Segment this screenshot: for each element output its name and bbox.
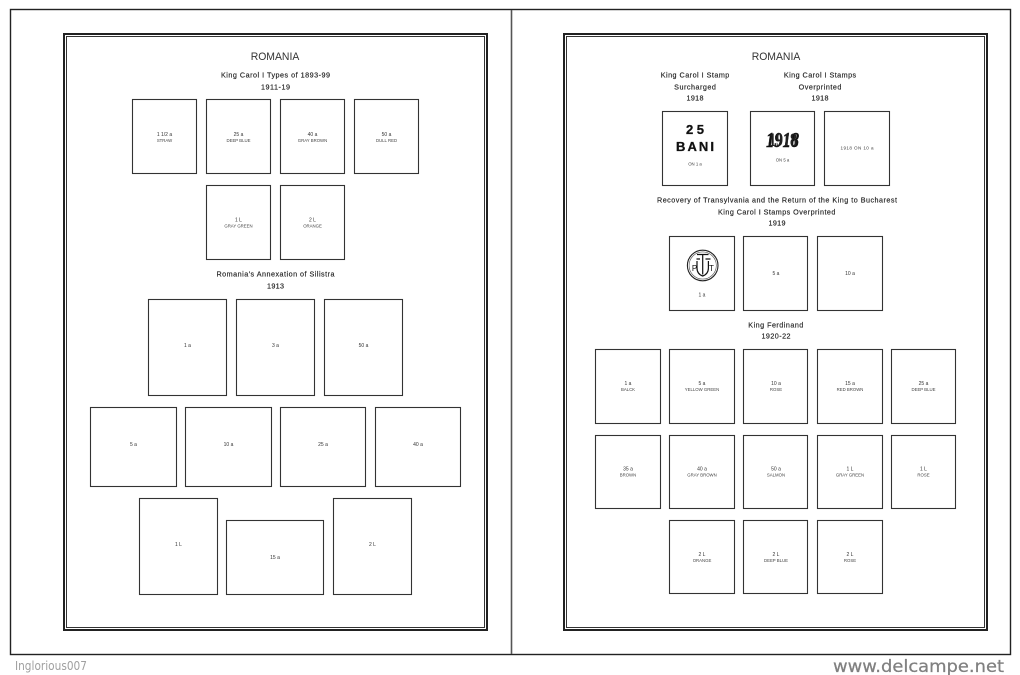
stamp: Silistra 40 a xyxy=(376,408,460,486)
stamp: Silistra 3 a xyxy=(236,300,314,396)
heading: King Carol I Stamps Overprinted xyxy=(784,70,857,102)
stamp: 2 L deep blue: DEEP BLUE xyxy=(764,558,788,563)
stamp: 1918 on 10 a xyxy=(824,112,890,186)
stamp: Silistra 1 L xyxy=(140,498,218,594)
stamp: Silistra 25 a xyxy=(280,408,366,486)
stamp: 2 L orange xyxy=(670,520,734,594)
stamp: 2 L rose: ROSE xyxy=(844,558,856,563)
stamp: 5 a yellow green: 5 a xyxy=(699,381,706,387)
stamp: 40 a gray brown: GRAY BROWN xyxy=(298,138,327,143)
stamp: 2 L orange: ORANGE xyxy=(693,558,711,563)
heading: King Carol I Stamps Overprinted: King Carol I Stamps xyxy=(784,70,857,80)
heading: King Ferdinand xyxy=(748,320,803,340)
stamp: 25 a deep blue: DEEP BLUE xyxy=(226,138,251,143)
stamp: 1 L rose xyxy=(892,436,956,508)
stamp: 25 BANI on 1 a: ON 1 a xyxy=(688,162,702,166)
left page double border xyxy=(64,34,487,630)
stamp: 1 L gray green xyxy=(206,186,270,260)
stamp: Silistra 25 a: 25 a xyxy=(318,442,328,448)
stamp: Silistra 2 L xyxy=(334,498,412,594)
stamp: 1 1/2 a straw: STRAW xyxy=(157,138,173,143)
stamp: Silistra 2 L: 2 L xyxy=(369,542,376,548)
heading: King Carol I Types: 1911-19 xyxy=(261,82,290,92)
stamp: 1 a black: 1 a xyxy=(625,381,632,387)
right page double border xyxy=(564,34,987,630)
heading: King Carol I Stamp Surcharged: 1918 xyxy=(686,94,704,102)
stamp: 40 a gray brown: GRAY BROWN xyxy=(687,472,717,478)
heading: King Carol I Stamp Surcharged xyxy=(661,70,729,102)
stamp: 25 a deep blue xyxy=(892,350,956,424)
stamp: 40 a gray brown xyxy=(280,100,344,174)
stamp: Silistra 5 a xyxy=(90,408,176,486)
stamp: 10 a: 10 a xyxy=(845,271,855,277)
stamp: 40 a gray brown: 40 a xyxy=(697,466,707,472)
heading: King Carol I Types: King Carol I Types of 1893-99 xyxy=(221,70,330,80)
stamp: 2 L deep blue xyxy=(744,520,808,594)
stamp: 1 1/2 a straw: 1 1/2 a xyxy=(157,132,172,138)
heading: King Carol I Types xyxy=(221,70,330,92)
stamp: Silistra 1 a xyxy=(148,300,226,396)
heading: King Ferdinand: 1920-22 xyxy=(762,332,790,340)
stamp: Silistra 15 a: 15 a xyxy=(270,555,280,561)
stamp: Silistra 15 a xyxy=(226,520,324,594)
stamp: 5 a yellow green: YELLOW GREEN xyxy=(685,387,719,392)
stamp: 1918 on 10 a: 1918 ON 10 a xyxy=(840,146,874,150)
stamp: 1 L gray green: GRAY GREEN xyxy=(836,472,864,478)
stamp: 50 a salmon: 50 a xyxy=(771,466,781,472)
stamp: 15 a red brown: RED BROWN xyxy=(837,387,863,392)
stamp: 1 a black xyxy=(596,350,660,424)
stamp: 5 a: 5 a xyxy=(773,271,780,277)
stamp: 25 a deep blue xyxy=(206,100,270,174)
icon: PTT circle monogram: P xyxy=(692,264,697,273)
stamp: 1918 overprint on 5 a: 1918 xyxy=(769,130,797,151)
stamp: 5 a xyxy=(744,236,808,310)
heading: ROMANIA right: ROMANIA xyxy=(752,51,801,63)
heading: King Carol I Stamp Surcharged: King Carol I Stamp xyxy=(661,70,729,80)
stamp: 40 a gray brown: 40 a xyxy=(308,132,318,138)
stamp: 50 a dull red xyxy=(354,100,418,174)
heading: Recovery of Transylvania xyxy=(657,196,897,228)
stamp: Silistra 40 a: 40 a xyxy=(413,442,423,448)
stamp: 1 L gray green: 1 L xyxy=(847,466,854,472)
stamp: 1 L rose: 1 L xyxy=(920,466,927,472)
stamp: 10 a rose: 10 a xyxy=(771,381,781,387)
heading: King Carol I Stamps Overprinted: 1918 xyxy=(812,94,828,102)
heading: Recovery of Transylvania: 1919 xyxy=(768,218,786,228)
stamp: 10 a xyxy=(818,236,882,310)
stamp: 2 L orange xyxy=(280,186,344,260)
stamp: 35 a brown: 35 a xyxy=(623,466,633,472)
stamp: 1918 overprint on 5 a: ON 5 a xyxy=(776,158,790,162)
icon: PTT circle monogram xyxy=(687,250,718,281)
stamp: 25 BANI on 1 a: BANI xyxy=(676,139,714,154)
stamp: 2 L deep blue: 2 L xyxy=(773,552,780,558)
stamp: 50 a salmon xyxy=(744,436,808,508)
stamp: 2 L rose xyxy=(818,520,882,594)
stamp: 25 BANI on 1 a: 25 xyxy=(686,122,704,137)
stamp: 1 L gray green: GRAY GREEN xyxy=(224,224,253,228)
stamp: 2 L orange: ORANGE xyxy=(303,224,322,228)
stamp: 1 L gray green: 1 L xyxy=(235,218,242,224)
stamp: 25 a deep blue: 25 a xyxy=(919,381,929,387)
stamp: PTT monogram on 1 a: 1 a xyxy=(699,292,706,298)
stamp: 1 1/2 a straw xyxy=(132,100,196,174)
panel: left album page xyxy=(64,34,487,630)
heading: Recovery of Transylvania: King Carol I Stamps Overprinted xyxy=(718,208,835,216)
heading: Annexation of Silistra: 1913 xyxy=(267,282,284,290)
stamp: 1 L rose: ROSE xyxy=(917,472,930,478)
stamp: Silistra 10 a xyxy=(186,408,272,486)
heading: Recovery of Transylvania: Recovery of Transylvania and the Return of the King to Bucharest xyxy=(657,196,897,204)
stamp: 2 L orange: 2 L xyxy=(309,218,316,224)
footer: seller name: Inglorious007 xyxy=(15,659,87,673)
stamp: Silistra 10 a: 10 a xyxy=(224,442,234,448)
stamp: 40 a gray brown xyxy=(670,436,734,508)
stamp: Silistra 1 a: 1 a xyxy=(184,343,191,349)
stamp: 5 a yellow green xyxy=(670,350,734,424)
heading: King Carol I Stamps Overprinted: Overprinted xyxy=(799,82,841,92)
stamp: 15 a red brown: 15 a xyxy=(845,381,855,387)
stamp: Silistra 50 a xyxy=(324,300,402,396)
stamp: 10 a rose: ROSE xyxy=(770,387,782,392)
heading: King Ferdinand: King Ferdinand xyxy=(748,320,803,330)
stamp: 50 a salmon: SALMON xyxy=(767,472,785,478)
stamp: 25 a deep blue: 25 a xyxy=(234,132,244,138)
stamp: 25 BANI on 1 a xyxy=(662,112,728,186)
stamp: 15 a red brown xyxy=(818,350,882,424)
heading: Annexation of Silistra: Romania's Annexation of Silistra xyxy=(216,270,334,278)
stamp: 35 a brown: BROWN xyxy=(620,472,636,478)
panel: right album page xyxy=(564,34,987,630)
stamp: Silistra 1 L: 1 L xyxy=(175,542,182,548)
stamp: Silistra 3 a: 3 a xyxy=(272,343,279,349)
heading: Annexation of Silistra xyxy=(216,270,334,290)
stamp: PTT monogram on 1 a xyxy=(670,236,734,310)
stamp: 50 a dull red: 50 a xyxy=(382,132,392,138)
stamp: 10 a rose xyxy=(744,350,808,424)
stamp: 1918 overprint on 5 a xyxy=(750,112,814,186)
stamp: Silistra 5 a: 5 a xyxy=(130,442,137,448)
icon: PTT circle monogram: T xyxy=(709,264,714,273)
heading: King Carol I Stamp Surcharged: Surcharged xyxy=(674,82,716,92)
stamp: 1 L gray green xyxy=(818,436,882,508)
stamp: 2 L orange: 2 L xyxy=(699,552,706,558)
heading: ROMANIA left: ROMANIA xyxy=(251,51,300,63)
stamp: 50 a dull red: DULL RED xyxy=(376,138,397,143)
stamp: 35 a brown xyxy=(596,436,660,508)
stamp: 25 a deep blue: DEEP BLUE xyxy=(911,387,936,392)
stamp: 1 a black: BALCK xyxy=(621,387,635,392)
stamp: 2 L rose: 2 L xyxy=(847,552,854,558)
stamp: 1918 overprint on 5 a: 1918 xyxy=(766,128,799,152)
stamp: Silistra 50 a: 50 a xyxy=(359,343,369,349)
